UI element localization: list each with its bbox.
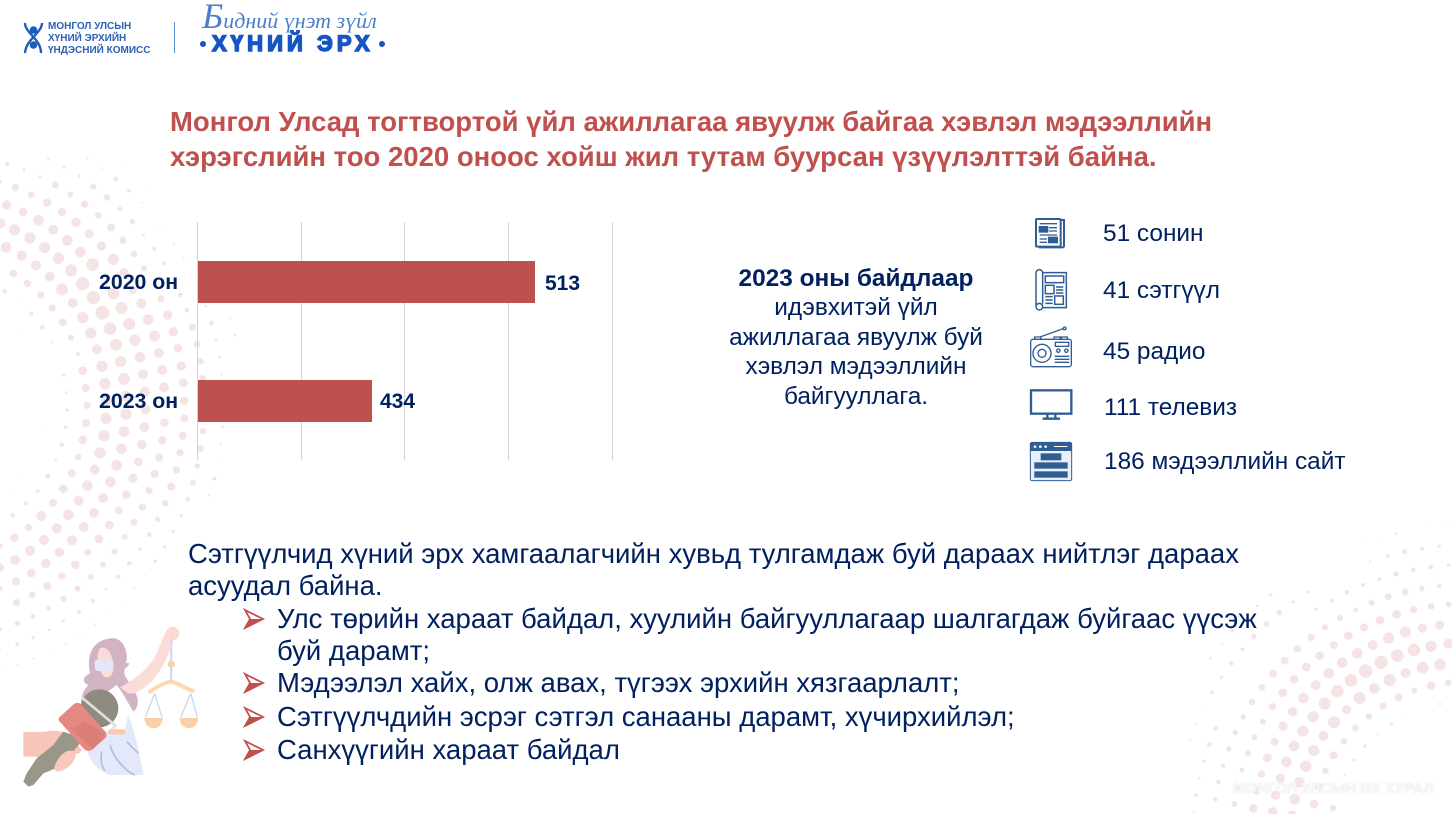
logo divider [174, 22, 175, 53]
center text block: идэвхитэй үйл [774, 294, 938, 321]
icon: magazine [1035, 268, 1068, 311]
bullet 1 [242, 603, 1257, 666]
text: magazines: 41 сэтгүүл [1103, 277, 1220, 304]
logo text: ХҮНИЙ ЭРХИЙН [48, 33, 126, 44]
text: websites: 186 мэдээллийн сайт [1104, 448, 1346, 475]
text: television: 111 телевиз [1104, 394, 1237, 421]
center text block: байгууллага. [784, 383, 928, 410]
bar chart [99, 222, 613, 460]
icon: commission emblem [24, 23, 44, 54]
title [170, 106, 1212, 172]
center text block: 2023 оны байдлаар [739, 265, 973, 292]
bullet 1: буй дарамт; [277, 635, 430, 666]
center text block [729, 265, 983, 410]
bullet 1: Улс төрийн хараат байдал, хуулийн байгууллагаар шалгагдаж буйгаас үүсэж [277, 603, 1257, 634]
body paragraph: Сэтгүүлчид хүний эрх хамгаалагчийн хувьд тулгамдаж буй дараах нийтлэг дараах [188, 538, 1239, 569]
title: хэрэгслийн тоо 2020 оноос хойш жил тутам буурсан үзүүлэлттэй байна. [170, 141, 1157, 172]
media list [1030, 218, 1346, 482]
icon: newspaper [1035, 218, 1065, 248]
label: 2020: 2020 он [99, 270, 178, 294]
icon: television [1030, 389, 1072, 420]
center text block: ажиллагаа явуулж буй [729, 324, 983, 351]
value: 434: 434 [380, 390, 415, 412]
center text block: хэвлэл мэдээллийн [746, 353, 966, 380]
illustration: lady justice and microphone [23, 626, 198, 787]
bullet 2: Мэдээлэл хайх, олж авах, түгээх эрхийн хязгаарлалт; [277, 667, 960, 698]
body paragraph: асуудал байна. [188, 570, 383, 601]
bar: 2023 [198, 380, 372, 422]
logo text: ҮНДЭСНИЙ КОМИСС [48, 45, 150, 56]
logo text: МОНГОЛ УЛСЫН [48, 21, 131, 32]
logo text [48, 21, 150, 56]
watermark: МОНГОЛ УЛСЫН ИХ ХУРАЛ [1233, 781, 1434, 797]
text: radio: 45 радио [1103, 338, 1205, 365]
title: Монгол Улсад тогтвортой үйл ажиллагаа явуулж байгаа хэвлэл мэдээллийн [170, 106, 1212, 137]
text: newspapers: 51 сонин [1103, 220, 1204, 247]
body paragraph [188, 538, 1239, 601]
label: 2023: 2023 он [99, 388, 178, 412]
bullet list [242, 603, 1257, 765]
slogan dots [200, 41, 385, 47]
bullet 4: Санхүүгийн хараат байдал [277, 734, 620, 765]
logo: human rights slogan [200, 0, 385, 56]
logo: national human rights commission [24, 21, 150, 56]
value: 513: 513 [545, 272, 580, 294]
icon: news website [1030, 442, 1072, 482]
slogan heading: ХҮНИЙ ЭРХ [212, 31, 374, 56]
bullet 3: Сэтгүүлчдийн эсрэг сэтгэл санааны дарамт, хүчирхийлэл; [277, 701, 1015, 732]
bar: 2020 [198, 261, 535, 303]
icon: radio [1030, 326, 1072, 368]
